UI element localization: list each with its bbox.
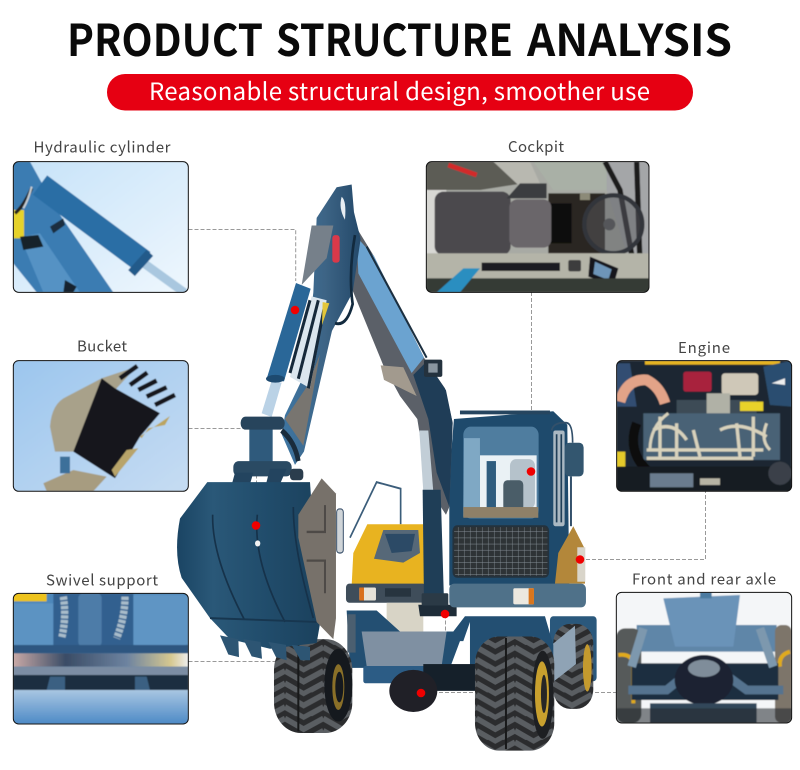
rear wheel	[550, 616, 597, 709]
photo: front and rear axle	[616, 592, 792, 723]
panel: hydraulic cylinder	[13, 136, 190, 297]
chassis	[347, 603, 553, 712]
subtitle banner: Reasonable structural design, smoother use	[149, 72, 650, 107]
label: bucket: Bucket	[77, 336, 127, 356]
rear engine hood	[346, 482, 426, 603]
title: STRUCTURE	[276, 5, 513, 69]
label: front and rear axle: Front and rear axle	[632, 568, 776, 590]
red marker dots	[252, 306, 584, 697]
panel: front and rear axle	[616, 568, 792, 723]
photo: engine	[617, 361, 792, 491]
panel: cockpit	[426, 136, 649, 292]
boom	[352, 220, 453, 515]
panel: swivel support	[13, 570, 188, 724]
panel: bucket	[13, 336, 188, 491]
dashed leader lines	[188, 230, 706, 692]
title: PRODUCT	[67, 5, 263, 69]
cab	[449, 411, 586, 607]
label: engine: Engine	[678, 337, 730, 358]
label: hydraulic cylinder: Hydraulic cylinder	[34, 136, 171, 158]
bucket	[177, 478, 336, 660]
front wheels	[274, 636, 554, 751]
label: cockpit: Cockpit	[508, 136, 564, 157]
hydraulic cylinder	[262, 283, 311, 417]
photo: bucket	[13, 361, 188, 491]
boom cylinder	[419, 430, 448, 605]
photo: cockpit	[426, 162, 649, 292]
title: ANALYSIS	[526, 5, 732, 69]
photo: swivel support	[13, 593, 188, 724]
photo: hydraulic cylinder	[13, 162, 190, 297]
bucket linkage	[227, 417, 303, 507]
label: swivel support: Swivel support	[46, 570, 158, 590]
title	[67, 5, 732, 69]
panel: engine	[617, 337, 792, 491]
excavator illustration	[177, 185, 597, 751]
side door frame	[337, 509, 343, 553]
stick arm	[282, 185, 361, 465]
